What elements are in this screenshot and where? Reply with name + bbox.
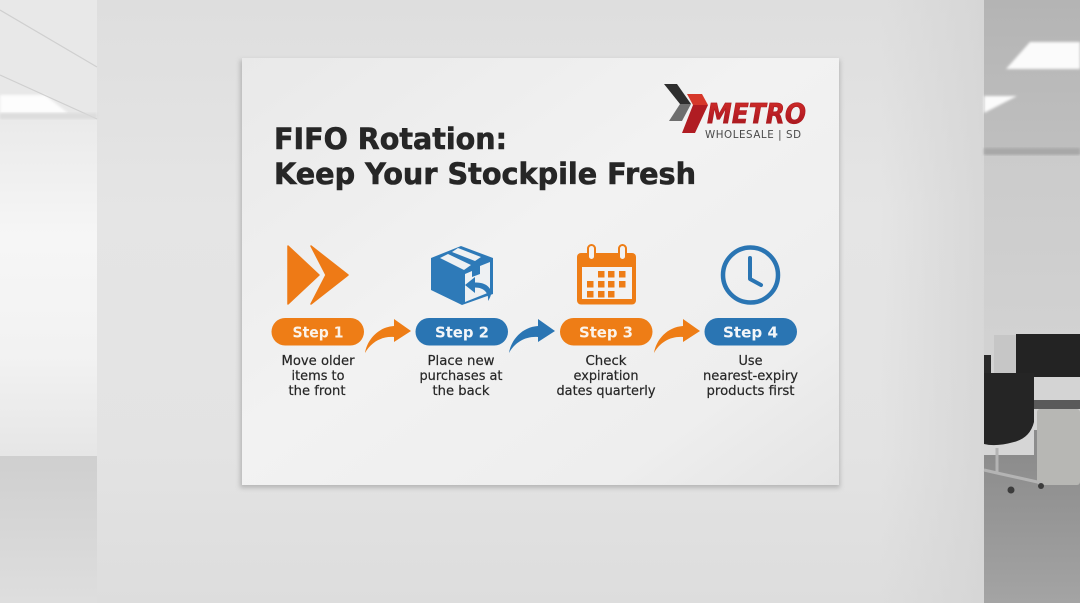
- step 1 description: Move older: [282, 354, 355, 369]
- step 2: [416, 246, 508, 399]
- step 2 description: the back: [432, 384, 490, 399]
- icon: clock: [723, 248, 778, 302]
- step 2 pill: Step 2: [435, 324, 489, 342]
- step 2 description: Place new: [428, 354, 495, 369]
- step 4 pill: Step 4: [723, 324, 778, 342]
- step 1: [272, 246, 364, 399]
- title: Keep Your Stockpile Fresh: [274, 157, 696, 191]
- step 4 description: [703, 354, 798, 399]
- step 2 description: [420, 354, 502, 399]
- step 3 description: expiration: [574, 369, 638, 384]
- step 3: [556, 245, 656, 399]
- step 4: [703, 248, 798, 399]
- step 2 pill: [416, 318, 508, 346]
- logo: Metro Wholesale SD: WHOLESALE | SD: [705, 129, 801, 141]
- step 1 pill: Step 1: [292, 324, 344, 342]
- arrow: step 2 to 3: [509, 319, 555, 353]
- logo: Metro Wholesale SD: METRO: [707, 98, 806, 130]
- step 3 pill: [560, 318, 652, 346]
- icon: calendar: [577, 245, 636, 304]
- step 1 description: [282, 354, 355, 399]
- step 4 description: nearest-expiry: [703, 369, 798, 384]
- icon: box with return arrow: [431, 246, 493, 305]
- background: left office room: [0, 0, 97, 603]
- icon: fast forward chevrons: [288, 246, 348, 304]
- step 3 pill: Step 3: [579, 324, 633, 342]
- arrow: step 1 to 2: [365, 319, 411, 353]
- step 3 description: Check: [586, 354, 627, 369]
- step 3 description: dates quarterly: [556, 384, 656, 399]
- step 2 description: purchases at: [420, 369, 502, 384]
- arrow: step 3 to 4: [654, 319, 700, 353]
- step 4 description: products first: [706, 384, 794, 399]
- title: [274, 122, 696, 191]
- step 3 description: [556, 354, 656, 399]
- step 1 description: items to: [292, 369, 345, 384]
- step 1 pill: [272, 318, 364, 346]
- logo: Metro Wholesale SD: [664, 84, 806, 141]
- background: right office room: [984, 0, 1080, 603]
- poster shadow: [240, 60, 840, 488]
- title: FIFO Rotation:: [274, 122, 507, 156]
- step 4 pill: [704, 318, 797, 346]
- panel: poster: [242, 58, 839, 485]
- step 1 description: the front: [288, 384, 346, 399]
- step 4 description: Use: [738, 354, 762, 369]
